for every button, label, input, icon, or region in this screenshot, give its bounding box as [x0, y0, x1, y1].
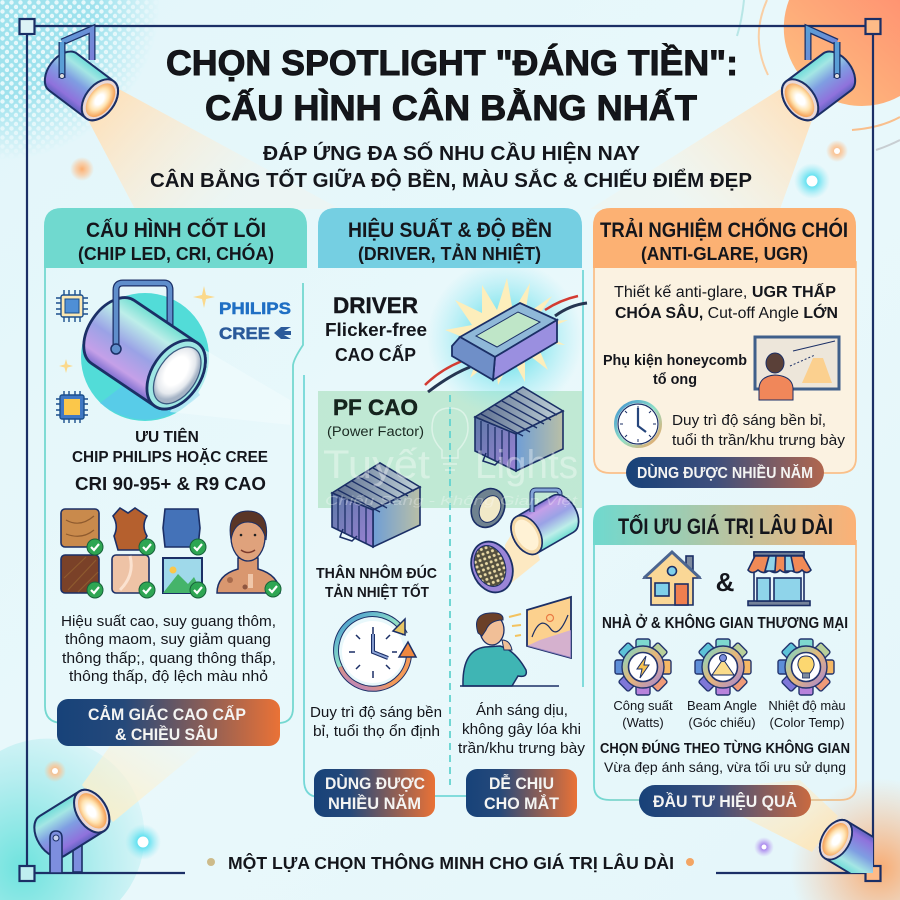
- text: performance notes: Hiệu suất cao, suy guang thôm,: [61, 614, 276, 630]
- text: power factor: [327, 395, 424, 439]
- text: comfortable light: trần/khu trưng bày: [458, 740, 586, 757]
- subtitle: CÂN BẰNG TỐT GIỮA ĐỘ BỀN, MÀU SẮC & CHIẾU ĐIỂM ĐẸP: [150, 168, 752, 192]
- text: lasting brightness: tuổi th trần/khu trưng bày: [672, 432, 846, 449]
- panel: performance and durability: [304, 208, 587, 817]
- panel outline: [45, 260, 303, 723]
- light beams: [82, 88, 838, 852]
- text: honeycomb accessory: Phụ kiện honeycomb: [603, 352, 747, 369]
- text: performance notes: thông thấp, độ lệch màu nhỏ: [69, 669, 268, 685]
- text: anti-glare design: CHÓA SÂU, Cut-off Angle LỚN: [615, 304, 838, 322]
- icon: spotlight top left: [37, 29, 125, 127]
- text: honeycomb accessory: tổ ong: [653, 371, 697, 388]
- text: choose per space: CHỌN ĐÚNG THEO TỪNG KHÔNG GIAN: [600, 739, 850, 757]
- text: aluminium body: THÂN NHÔM ĐÚC: [316, 564, 437, 582]
- text: lasting brightness: [310, 704, 442, 740]
- pill: premium feel: & CHIỀU SÂU: [115, 725, 218, 744]
- labels: parameters: Công suất: [613, 698, 673, 713]
- panel: long-term value: [593, 505, 856, 817]
- icon: gear color temperature: [778, 639, 834, 695]
- orange sun circle decoration: [784, 0, 900, 106]
- header: performance: HIỆU SUẤT & ĐỘ BỀN: [348, 218, 552, 242]
- text: lasting brightness: [672, 412, 846, 449]
- pill: many years: DÙNG ĐƯỢC NHIỀU NĂM: [637, 463, 813, 482]
- labels: parameters: Nhiệt độ màu: [768, 698, 846, 713]
- title: CẤU HÌNH CÂN BẰNG NHẤT: [205, 88, 697, 128]
- icon: hero spotlight: [72, 283, 290, 425]
- labels: parameters: Beam Angle: [687, 698, 757, 713]
- pill: easy on eyes: [466, 769, 577, 817]
- header: anti-glare: TRẢI NGHIỆM CHỐNG CHÓI: [600, 218, 848, 242]
- icon: heatsink right: [475, 387, 563, 471]
- icon: clock: [616, 402, 660, 446]
- title: CHỌN SPOTLIGHT "ĐÁNG TIỀN":: [166, 43, 738, 83]
- text: comfortable light: không gây lóa khi: [462, 721, 581, 738]
- icon: blue chip: [56, 290, 88, 322]
- text: aluminium body: TẢN NHIỆT TỐT: [325, 583, 429, 601]
- icon: spotlight top right: [775, 29, 863, 127]
- icon: reflector ring: [465, 483, 511, 533]
- icon: clock with arrow: [336, 614, 416, 689]
- text: lasting brightness: bỉ, tuổi thọ ổn định: [313, 723, 440, 740]
- text: lasting brightness: Duy trì độ sáng bền: [310, 704, 442, 721]
- text: driver: Flicker-free: [325, 320, 427, 340]
- text: power factor: PF CAO: [333, 395, 418, 420]
- icon: LED driver: [425, 260, 587, 416]
- text: choose per space: Vừa đẹp ánh sáng, vừa tối ưu sử dụng: [604, 759, 846, 775]
- text: performance notes: thông thấp;, quang thông thấp,: [62, 651, 276, 667]
- text: home and commercial: NHÀ Ở & KHÔNG GIAN THƯƠNG MẠI: [602, 614, 848, 632]
- watermark: [323, 408, 579, 508]
- icon: spotlight with honeycomb: [464, 489, 585, 598]
- icon: spotlight bottom left: [27, 784, 117, 873]
- pill: premium feel: CẢM GIÁC CAO CẤP: [88, 705, 246, 724]
- text: chip priority: ƯU TIÊN: [135, 428, 199, 446]
- header: long-term value: TỐI ƯU GIÁ TRỊ LÂU DÀI: [618, 513, 833, 539]
- icon: person viewing artwork: [755, 337, 839, 400]
- icon: yellow chip: [56, 391, 88, 423]
- panel body: [594, 262, 856, 473]
- text: power factor: (Power Factor): [327, 424, 424, 439]
- text: driver: CAO CẤP: [335, 344, 416, 365]
- panel body outline: [594, 540, 856, 800]
- labels: parameters: (Color Temp): [770, 715, 844, 730]
- labels: parameters: (Watts): [622, 715, 664, 730]
- halftone corner decoration: [0, 0, 160, 160]
- decorative arcs top right: [737, 0, 900, 150]
- icon: heatsink left: [332, 463, 420, 547]
- icon: shop: [748, 552, 811, 606]
- header: anti-glare: (ANTI-GLARE, UGR): [641, 244, 808, 264]
- text: chip priority: [72, 428, 268, 494]
- text: chip priority: CHIP PHILIPS HOẶC CREE: [72, 447, 268, 466]
- header: core configuration: (CHIP LED, CRI, CHÓA): [78, 243, 274, 264]
- header: core configuration: [44, 208, 307, 268]
- pill: easy on eyes: CHO MẮT: [484, 794, 560, 813]
- header: long-term value: [593, 505, 856, 545]
- subtitle: ĐÁP ỨNG ĐA SỐ NHU CẦU HIỆN NAY: [263, 141, 641, 165]
- pill: long lasting: NHIỀU NĂM: [328, 794, 421, 813]
- title: [166, 43, 738, 128]
- pill: easy on eyes: DỄ CHỊU: [489, 774, 554, 793]
- icon: gear wattage: [615, 639, 671, 695]
- text: comfortable light: [458, 702, 586, 757]
- text: performance notes: thông maom, suy giảm quang: [65, 632, 271, 648]
- panel: anti-glare experience: [593, 208, 856, 488]
- icon: spotlight bottom right: [818, 818, 873, 873]
- header: core configuration: CẤU HÌNH CỐT LÕI: [86, 218, 266, 242]
- header: performance: (DRIVER, TẢN NHIỆT): [358, 243, 541, 264]
- text: comfortable light: Ánh sáng dịu,: [476, 702, 568, 719]
- pill: long lasting: [314, 769, 435, 817]
- text: choose per space: [600, 739, 850, 775]
- text: anti-glare design: [614, 284, 838, 322]
- material swatches: [61, 508, 281, 598]
- glow dots: [44, 140, 848, 860]
- icon: sparkles: [59, 286, 215, 373]
- pill: many years: [626, 457, 824, 488]
- panel: core configuration: [44, 208, 307, 746]
- text: anti-glare design: Thiết kế anti-glare, UGR THẤP: [614, 284, 836, 301]
- orange glow bottom right: [790, 778, 900, 900]
- pill: long lasting: DÙNG ĐƯỢC: [325, 774, 425, 793]
- brand logos: PHILIPS: [219, 299, 291, 318]
- icon: house: [644, 552, 700, 605]
- pill: premium feel: [57, 699, 280, 746]
- text: chip priority: CRI 90-95+ & R9 CAO: [75, 474, 266, 494]
- text: driver: [325, 293, 427, 365]
- text: performance notes: [61, 614, 276, 685]
- text: honeycomb accessory: [603, 352, 747, 388]
- icon: person viewing screen: [460, 597, 571, 686]
- header: anti-glare: [593, 208, 856, 268]
- labels: parameters: (Góc chiếu): [688, 715, 756, 730]
- pill: effective investment: [639, 785, 811, 817]
- pill: effective investment: ĐẦU TƯ HIỆU QUẢ: [653, 792, 797, 811]
- ampersand: &: [716, 567, 734, 597]
- divider: [449, 395, 451, 785]
- text: aluminium body: [316, 564, 437, 601]
- watermark green band: [318, 391, 582, 508]
- text: lasting brightness: Duy trì độ sáng bền bỉ,: [672, 412, 826, 429]
- footer tagline: MỘT LỰA CHỌN THÔNG MINH CHO GIÁ TRỊ LÂU DÀI: [228, 852, 674, 873]
- person face: [217, 511, 280, 593]
- brand logos: CREE: [219, 324, 270, 343]
- watermark: Lights: [475, 443, 578, 487]
- watermark: Chiếu Sáng - Không Gian Việt: [325, 493, 579, 508]
- icon: gear beam angle: [695, 639, 751, 695]
- labels: parameters: [613, 698, 846, 730]
- brand logos: [219, 299, 291, 343]
- text: driver: DRIVER: [333, 293, 418, 318]
- watermark: Tuyết: [323, 443, 430, 487]
- teal circle decoration bottom left: [0, 739, 144, 900]
- header: performance: [318, 208, 582, 268]
- panel outline: [304, 270, 583, 797]
- subtitle: [150, 141, 752, 192]
